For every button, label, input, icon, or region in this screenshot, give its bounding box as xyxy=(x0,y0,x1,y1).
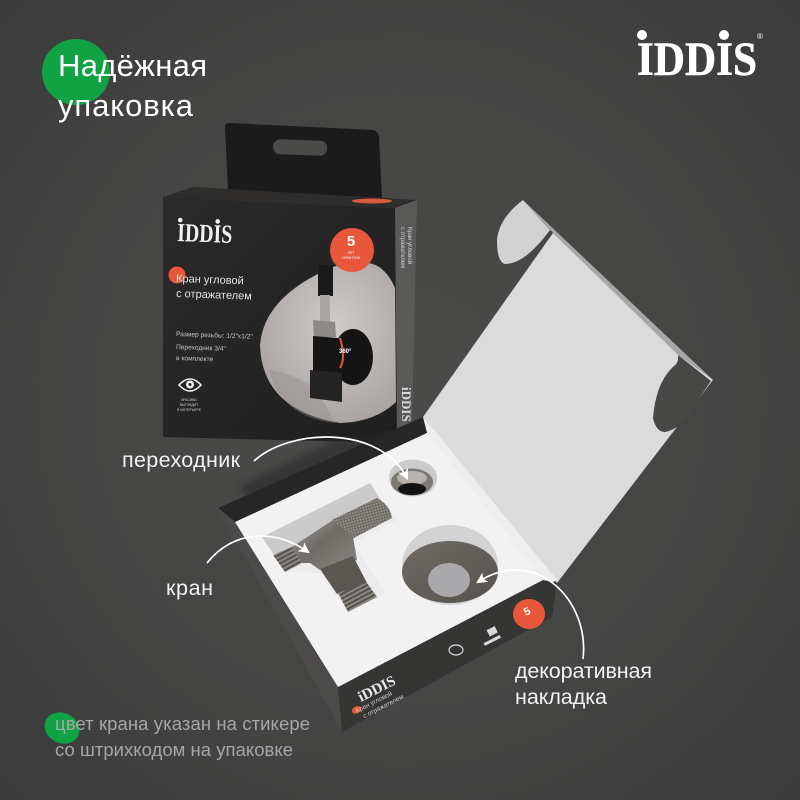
footnote xyxy=(55,713,310,760)
box logo: IDDIS xyxy=(177,218,233,249)
eye icon: КРАСИВО xyxy=(181,398,197,402)
box front heading xyxy=(350,685,405,724)
foam insert xyxy=(235,433,543,687)
box specs: Переходник 3/4" xyxy=(176,344,227,353)
side text: Кран угловой xyxy=(406,227,413,264)
footnote: со штрихкодом на упаковке xyxy=(55,739,293,760)
box front icons xyxy=(449,626,501,655)
lid inner panel xyxy=(423,233,713,583)
box top strip xyxy=(163,187,417,208)
back wall xyxy=(218,417,427,522)
box front warranty badge: 5 xyxy=(522,605,533,619)
box front warranty badge xyxy=(513,599,545,629)
side logo: iDDIS xyxy=(399,387,414,422)
label: декоративная накладка: декоративная xyxy=(515,659,652,683)
box heading: с отражателем xyxy=(176,288,252,303)
label: декоративная накладка xyxy=(515,659,652,709)
box front logo: iDDIS xyxy=(356,673,398,706)
hang tab xyxy=(225,123,382,198)
box specs: Размер резьбы: 1/2"x1/2" xyxy=(176,330,253,341)
left wall xyxy=(218,508,342,732)
title: упаковка xyxy=(58,88,194,123)
lower fitting xyxy=(320,556,367,594)
lid thumb cut xyxy=(653,355,711,432)
arrow to decorative cover xyxy=(478,570,584,659)
box specs: в комплекте xyxy=(176,355,214,363)
valve xyxy=(273,498,392,612)
box front heading: с отражателем xyxy=(362,693,405,720)
eye icon xyxy=(177,379,202,412)
arrow to valve xyxy=(207,536,308,563)
box front panel xyxy=(163,197,397,443)
label: кран: кран xyxy=(166,576,213,600)
lower thread xyxy=(338,583,377,612)
lid hinge band xyxy=(423,417,557,585)
knurled handle xyxy=(332,498,392,540)
valve body xyxy=(292,520,357,570)
box heading xyxy=(176,273,252,303)
valve on photo: 360° xyxy=(339,349,352,355)
eye icon: ВЫГЛЯДИТ xyxy=(180,403,198,407)
box specs xyxy=(176,330,253,363)
valve cavity xyxy=(262,483,397,612)
lid outer edge xyxy=(523,200,713,382)
front wall xyxy=(338,580,557,732)
box heading: Кран угловой xyxy=(176,273,244,287)
lid fold flap xyxy=(497,200,550,264)
warranty badge: 5 xyxy=(347,233,355,250)
arrow to adapter xyxy=(254,437,407,478)
green accent circle behind footnote xyxy=(39,707,85,749)
footnote: цвет крана указан на стикере xyxy=(55,713,310,734)
valve on photo xyxy=(310,265,373,402)
label: декоративная накладка: накладка xyxy=(515,685,607,709)
label: переходник: переходник xyxy=(122,448,241,472)
box front heading: Кран угловой xyxy=(354,689,394,715)
logo: IDDIS: IDDIS xyxy=(637,33,757,86)
cavity shaded wall xyxy=(262,483,392,556)
side text xyxy=(399,227,413,268)
left thread xyxy=(273,547,302,572)
warranty badge: ГАРАНТИИ xyxy=(342,256,361,260)
warranty badge xyxy=(330,228,374,272)
hang hole xyxy=(273,139,327,156)
small orange accent xyxy=(168,266,186,284)
top strip badge xyxy=(352,198,392,204)
side text: с отражателем xyxy=(399,227,405,268)
title: Надёжная xyxy=(58,48,207,83)
decorative cover cavity xyxy=(402,525,498,605)
open box shadow xyxy=(240,430,412,506)
decorative cover plate xyxy=(402,541,498,603)
title xyxy=(58,48,207,123)
green accent circle behind title xyxy=(42,39,110,105)
eye icon: В ИНТЕРЬЕРЕ xyxy=(177,408,202,412)
closed product box xyxy=(163,123,417,443)
wall photo xyxy=(260,262,396,423)
warranty badge: ЛЕТ xyxy=(348,251,355,255)
adapter cavity xyxy=(389,460,437,496)
open box xyxy=(218,200,713,732)
box side panel xyxy=(395,200,417,442)
logo: IDDIS: ® xyxy=(757,32,763,41)
